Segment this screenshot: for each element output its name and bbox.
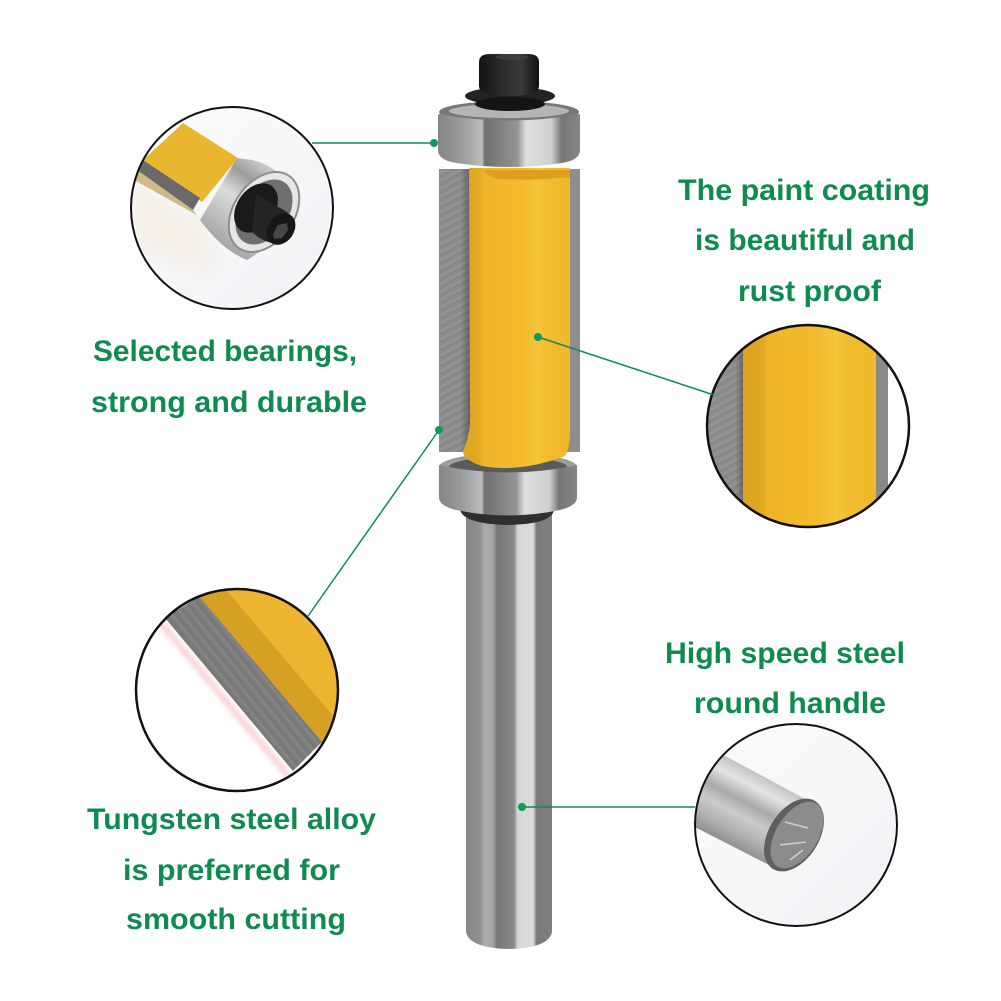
text: tungsten steel: Tungsten steel alloy xyxy=(87,803,376,836)
red edge glow xyxy=(160,622,290,778)
panel: bearing close-up circle xyxy=(130,106,334,310)
panel: tungsten edge close-up circle xyxy=(134,588,340,792)
lower bearing top ring xyxy=(439,453,577,481)
text: paint coating: is beautiful and xyxy=(695,224,915,257)
router bit product xyxy=(438,54,580,949)
soft shadow xyxy=(132,183,212,266)
lower bearing body xyxy=(439,465,577,516)
yellow painted flute xyxy=(463,168,570,468)
text: high speed steel: round handle xyxy=(694,687,886,720)
bearing body xyxy=(200,158,276,260)
callout line: paint coating xyxy=(534,333,714,395)
text: high speed steel xyxy=(665,637,905,720)
yellow coating xyxy=(743,320,876,535)
steel strip xyxy=(137,160,200,210)
callout line: bearing xyxy=(312,139,438,147)
text: tungsten steel: is preferred for xyxy=(123,854,340,887)
text: tungsten steel: smooth cutting xyxy=(126,903,346,936)
bearing front ring xyxy=(228,171,300,253)
text: paint coating: rust proof xyxy=(738,275,882,308)
panel: round handle close-up circle xyxy=(694,723,898,927)
cutter steel body xyxy=(439,169,580,452)
hex socket xyxy=(273,223,288,239)
black flange xyxy=(465,87,555,105)
rod end face xyxy=(764,798,824,872)
black screw head xyxy=(479,54,539,96)
text: paint coating: The paint coating xyxy=(678,174,930,207)
steel blade xyxy=(165,596,322,771)
text: tungsten steel xyxy=(87,803,376,936)
yellow coated surface xyxy=(200,590,337,742)
right cutting edge xyxy=(570,169,580,452)
lower washer xyxy=(460,510,554,525)
yellow shaft xyxy=(143,123,238,202)
callout line: handle xyxy=(518,803,695,811)
darker yellow strip xyxy=(200,591,333,742)
callout line: tungsten edge xyxy=(308,426,443,616)
text: selected bearings: strong and durable xyxy=(91,386,367,419)
black screw xyxy=(234,183,278,233)
steel rod xyxy=(696,756,805,865)
screw socket xyxy=(496,54,528,60)
upper bearing xyxy=(438,101,580,167)
right steel edge xyxy=(876,353,888,499)
text: selected bearings xyxy=(91,335,367,419)
text: paint coating xyxy=(678,174,930,308)
brushed steel xyxy=(708,350,743,502)
panel: paint coating close-up circle xyxy=(706,324,910,528)
flute top shadow xyxy=(483,170,570,180)
text: high speed steel: High speed steel xyxy=(665,637,905,670)
shank xyxy=(466,510,552,949)
text: selected bearings: Selected bearings, xyxy=(93,335,357,368)
